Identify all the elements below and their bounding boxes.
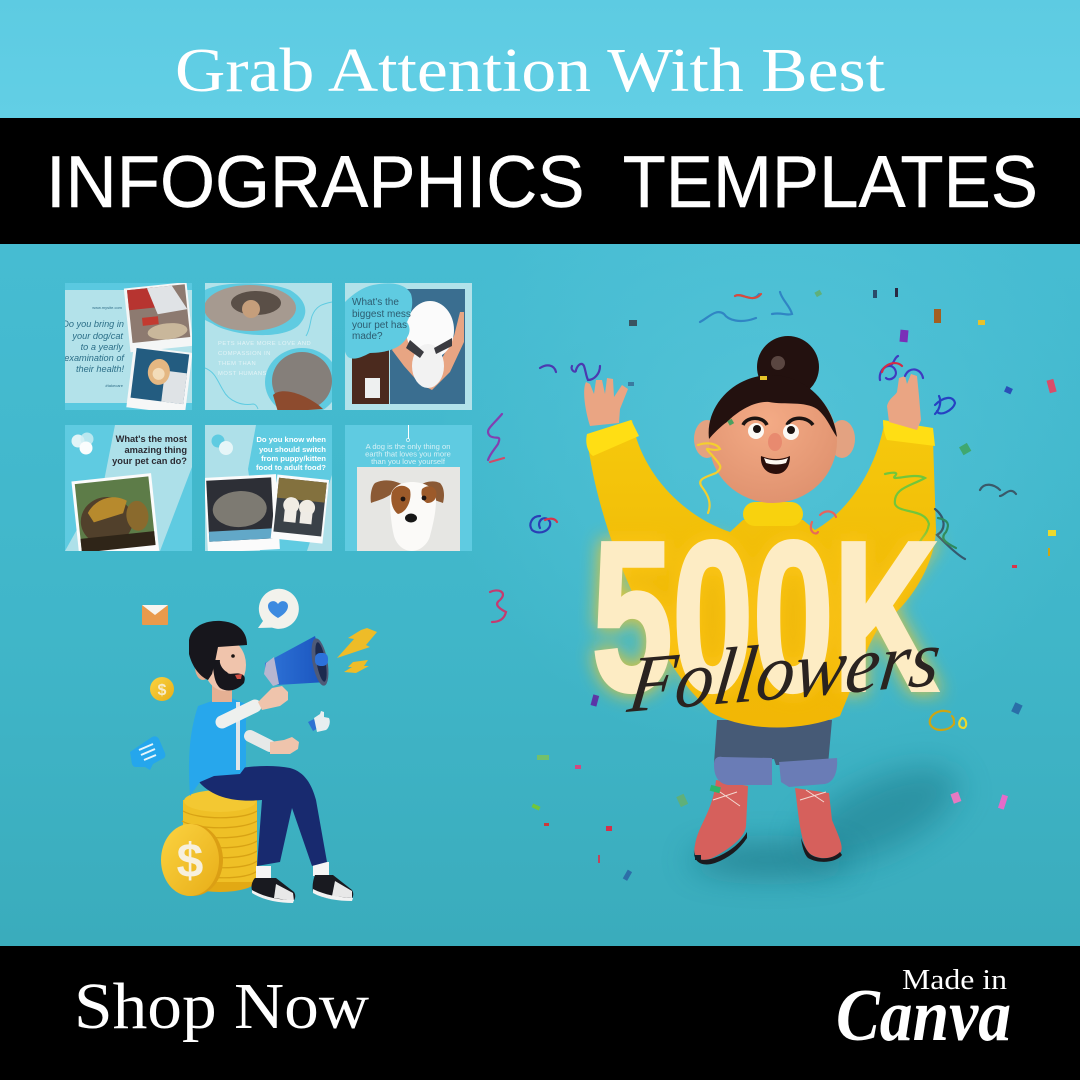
thumbnail 2: pets have more love: MOST HUMANS xyxy=(218,371,267,377)
man: shoes xyxy=(252,862,353,903)
thumbnail 6: a dog is the only thing: than you love yourself xyxy=(371,457,446,466)
thumbnail 1: yearly examination: your dog/cat xyxy=(71,331,123,341)
footer band xyxy=(0,946,1080,1080)
illustration: man with megaphone on coins xyxy=(130,589,377,903)
thumbnail 1: yearly examination xyxy=(62,282,195,414)
thumbnail 2: pets have more love: PETS HAVE MORE LOVE AND xyxy=(218,341,311,347)
thumbnail 5: puppy kitten food: food to adult food? xyxy=(256,463,326,472)
thumbnail 6: a dog is the only thing: A dog is the only thing on xyxy=(366,442,450,451)
thumbnail 3: biggest mess: biggest mess xyxy=(352,309,411,320)
thumbnail 1: yearly examination: their health! xyxy=(76,364,124,374)
icon: heart speech bubble xyxy=(258,589,299,629)
thumbnail 2: pets have more love: COMPASSION IN xyxy=(218,351,271,357)
sweater and sleeves xyxy=(586,420,936,728)
thumbnail 4: most amazing thing: amazing thing xyxy=(124,445,187,455)
thumbnail 1: yearly examination: Do you bring in xyxy=(62,319,124,329)
thumbnail 3: biggest mess: your pet has xyxy=(352,320,407,331)
head xyxy=(694,336,855,503)
thumbnail grid xyxy=(62,282,472,559)
man: shirt xyxy=(189,696,246,796)
thumbnail 2: pets have more love: THEM THAN xyxy=(218,361,256,367)
thumbnail 5: puppy kitten food: you should switch xyxy=(259,445,326,454)
illustration: celebrating character xyxy=(488,288,1057,883)
icon: small dollar coin: $ xyxy=(158,682,167,699)
confetti xyxy=(532,288,1057,881)
icon: thumbs up xyxy=(308,711,330,732)
megaphone xyxy=(264,636,332,687)
thumbnail 1: yearly examination: #takecare xyxy=(105,383,124,388)
thumbnail 4: most amazing thing xyxy=(65,425,192,559)
icon: chat bubble xyxy=(130,736,165,770)
coin stack: $ xyxy=(177,835,204,888)
thumbnail 6: a dog is the only thing: earth that loves you more xyxy=(365,450,451,458)
thumbnail 1: yearly examination: www.mysite.com xyxy=(92,305,123,310)
floor shadow xyxy=(690,747,972,883)
thumbnail 6: a dog is the only thing xyxy=(345,425,472,551)
icon: small dollar coin xyxy=(150,677,174,701)
heading band: Infographics Templates xyxy=(0,118,1080,244)
thumbnail 5: puppy kitten food xyxy=(204,425,332,553)
badge: Made in Canva: Canva xyxy=(836,975,1011,1057)
top band background xyxy=(0,0,1080,118)
icon: lightning bolts xyxy=(337,628,377,673)
icon: envelope xyxy=(142,605,168,625)
thumbnail 5: puppy kitten food: from puppy/kitten xyxy=(261,454,326,463)
thumbnail 4: most amazing thing: your pet can do? xyxy=(112,456,187,466)
main teal background xyxy=(0,244,1080,946)
boots xyxy=(694,780,842,864)
thumbnail 1: yearly examination: examination of xyxy=(64,353,125,363)
title line: Grab Attention With Best: Grab Attention With Best xyxy=(175,37,885,105)
thumbnail 4: most amazing thing: What's the most xyxy=(116,434,187,444)
shorts xyxy=(714,720,837,787)
coin stack xyxy=(161,790,257,896)
call to action: Shop Now: Shop Now xyxy=(74,970,369,1043)
thumbnail 3: biggest mess xyxy=(344,283,472,410)
badge: Made in Canva: Made in xyxy=(902,964,1008,996)
streamers xyxy=(488,292,1016,730)
man: trousers xyxy=(199,766,327,866)
heading band: Infographics Templates: INFOGRAPHICS TEMPLATES xyxy=(46,142,1038,223)
Followers script: Followers xyxy=(623,614,946,730)
man: head xyxy=(189,621,247,702)
man: shirt placket xyxy=(236,702,240,770)
thumbnail 1: yearly examination: to a yearly xyxy=(81,342,124,352)
hands xyxy=(584,374,921,430)
thumbnail 3: biggest mess: What's the xyxy=(352,297,399,308)
thumbnail 2: pets have more love xyxy=(205,283,332,410)
thumbnail 5: puppy kitten food: Do you know when xyxy=(256,435,326,444)
man: arms and hands xyxy=(222,686,299,754)
thumbnail 3: biggest mess: made? xyxy=(352,331,383,342)
